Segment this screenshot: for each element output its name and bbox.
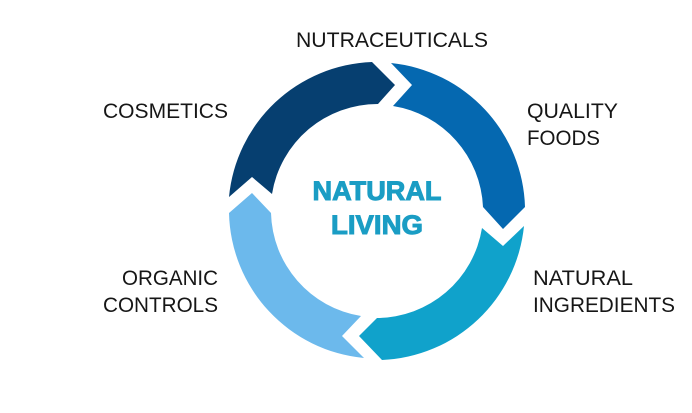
label: organic controls xyxy=(103,267,218,317)
label: quality foods xyxy=(527,100,618,150)
label: quality foods: FOODS xyxy=(527,127,600,150)
segment: nutraceuticals arrow (dark navy) xyxy=(229,62,395,197)
segment: natural ingredients arrow (teal) xyxy=(359,226,524,360)
segment: organic controls arrow (light blue) xyxy=(229,193,364,358)
segment: quality foods arrow (blue) xyxy=(391,63,525,229)
center title: natural living xyxy=(312,176,442,240)
label: nutraceuticals: NUTRACEUTICALS xyxy=(296,29,488,52)
label: organic controls: CONTROLS xyxy=(103,294,218,317)
label: natural ingredients: NATURAL xyxy=(533,267,633,290)
label: quality foods: QUALITY xyxy=(527,100,618,123)
center title: natural living: LIVING xyxy=(331,210,423,240)
label: organic controls: ORGANIC xyxy=(122,267,218,290)
label: natural ingredients xyxy=(533,267,675,317)
center title: natural living: NATURAL xyxy=(312,176,442,206)
label: cosmetics: COSMETICS xyxy=(103,100,228,123)
label: natural ingredients: INGREDIENTS xyxy=(533,294,675,317)
